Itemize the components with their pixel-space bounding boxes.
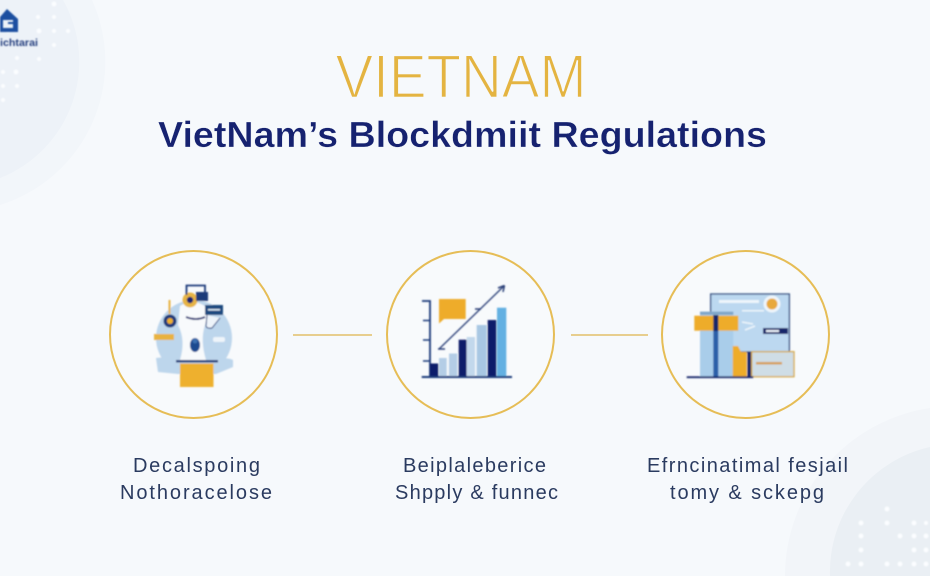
panel: second step — [387, 251, 554, 418]
label: third step: tomy & sckepg — [670, 482, 824, 504]
icon: logo house — [0, 9, 18, 32]
icon: globe with documents and envelope — [154, 286, 233, 387]
label: first step: Decalspoing — [133, 455, 260, 477]
circle frame — [662, 251, 829, 418]
label: third step — [647, 455, 848, 504]
circle frame — [387, 251, 554, 418]
panel: third step — [662, 251, 829, 418]
label: first step — [120, 455, 272, 504]
logo text: ichtarai — [0, 37, 38, 49]
connector: second to third — [571, 334, 648, 336]
icon: bar chart with arrow — [422, 286, 512, 378]
circle frame — [110, 251, 277, 418]
label: first step: Nothoracelose — [120, 482, 272, 504]
label: third step: Efrncinatimal fesjail — [647, 455, 848, 477]
label: second step: Shpply & funnec — [395, 482, 558, 504]
logo — [0, 9, 38, 49]
title: VIETNAM — [336, 42, 586, 110]
label: second step — [395, 455, 558, 504]
panel: first step — [110, 251, 277, 418]
icon: document, boxes and card — [687, 294, 794, 378]
label: second step: Beiplaleberice — [403, 455, 546, 477]
connector: first to second — [293, 334, 372, 336]
heading: VietNam’s Blockdmiit Regulations — [158, 114, 767, 155]
